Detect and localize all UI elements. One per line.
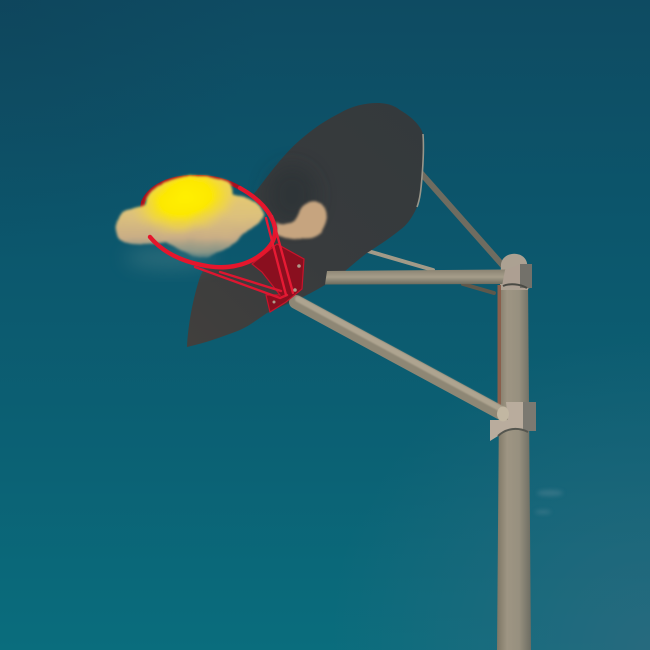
front fork brace [266, 216, 293, 295]
lower diagonal arm [296, 299, 505, 414]
backboard [187, 103, 423, 347]
rear braces behind the backboard [368, 172, 513, 293]
rim mounting plate [252, 244, 304, 312]
faint distant clouds [535, 490, 563, 514]
lower rails [195, 267, 287, 298]
cloud glow beneath [125, 246, 215, 270]
thin vertical strut [498, 285, 501, 407]
sky through the hoop and rear rim [142, 177, 275, 267]
upper bracket [502, 263, 532, 290]
upper horizontal arm [325, 270, 508, 284]
lower bracket [490, 402, 536, 441]
small cloud on the backboard [277, 202, 326, 239]
basketball rim [150, 188, 301, 304]
pole [497, 254, 531, 650]
front rim ring [150, 188, 275, 267]
plate bolts [297, 264, 301, 268]
cloud [115, 176, 264, 257]
